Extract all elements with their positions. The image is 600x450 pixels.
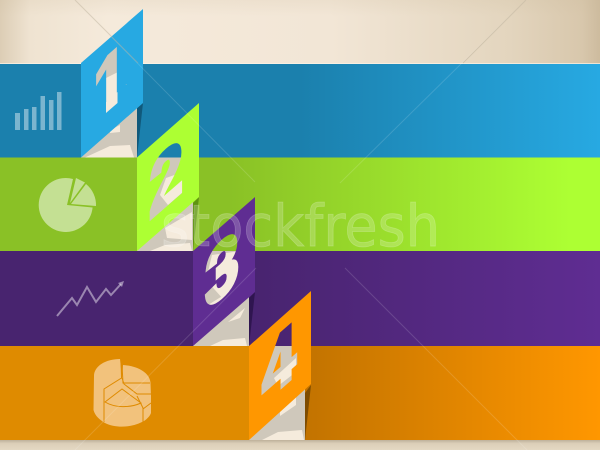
band: purple: [0, 251, 600, 346]
band: green: [0, 158, 600, 251]
icon: trend line arrow: [57, 281, 124, 316]
band: orange: [0, 346, 600, 440]
panel: flap 4 with number 4: [249, 291, 311, 440]
panel: flap 3 with number 3: [193, 197, 255, 346]
panel: flap 2 with number 2: [137, 103, 199, 251]
icon: bar chart: [15, 92, 62, 130]
band: blue: [0, 63, 600, 158]
fold recess 2: [137, 158, 199, 251]
icon: pie chart: [39, 178, 96, 232]
icon: 3D pie chart: [94, 359, 151, 427]
panel: flap 1 with number 1: [81, 9, 143, 158]
fold recess 3: [193, 251, 255, 346]
fold recess 4: [249, 346, 311, 440]
fold recess 1: [81, 16, 143, 158]
watermark: stockfresh: stockfresh: [161, 192, 440, 260]
bottom shadow strip: [0, 440, 600, 450]
watermark: diagonal lines: [75, 0, 527, 450]
